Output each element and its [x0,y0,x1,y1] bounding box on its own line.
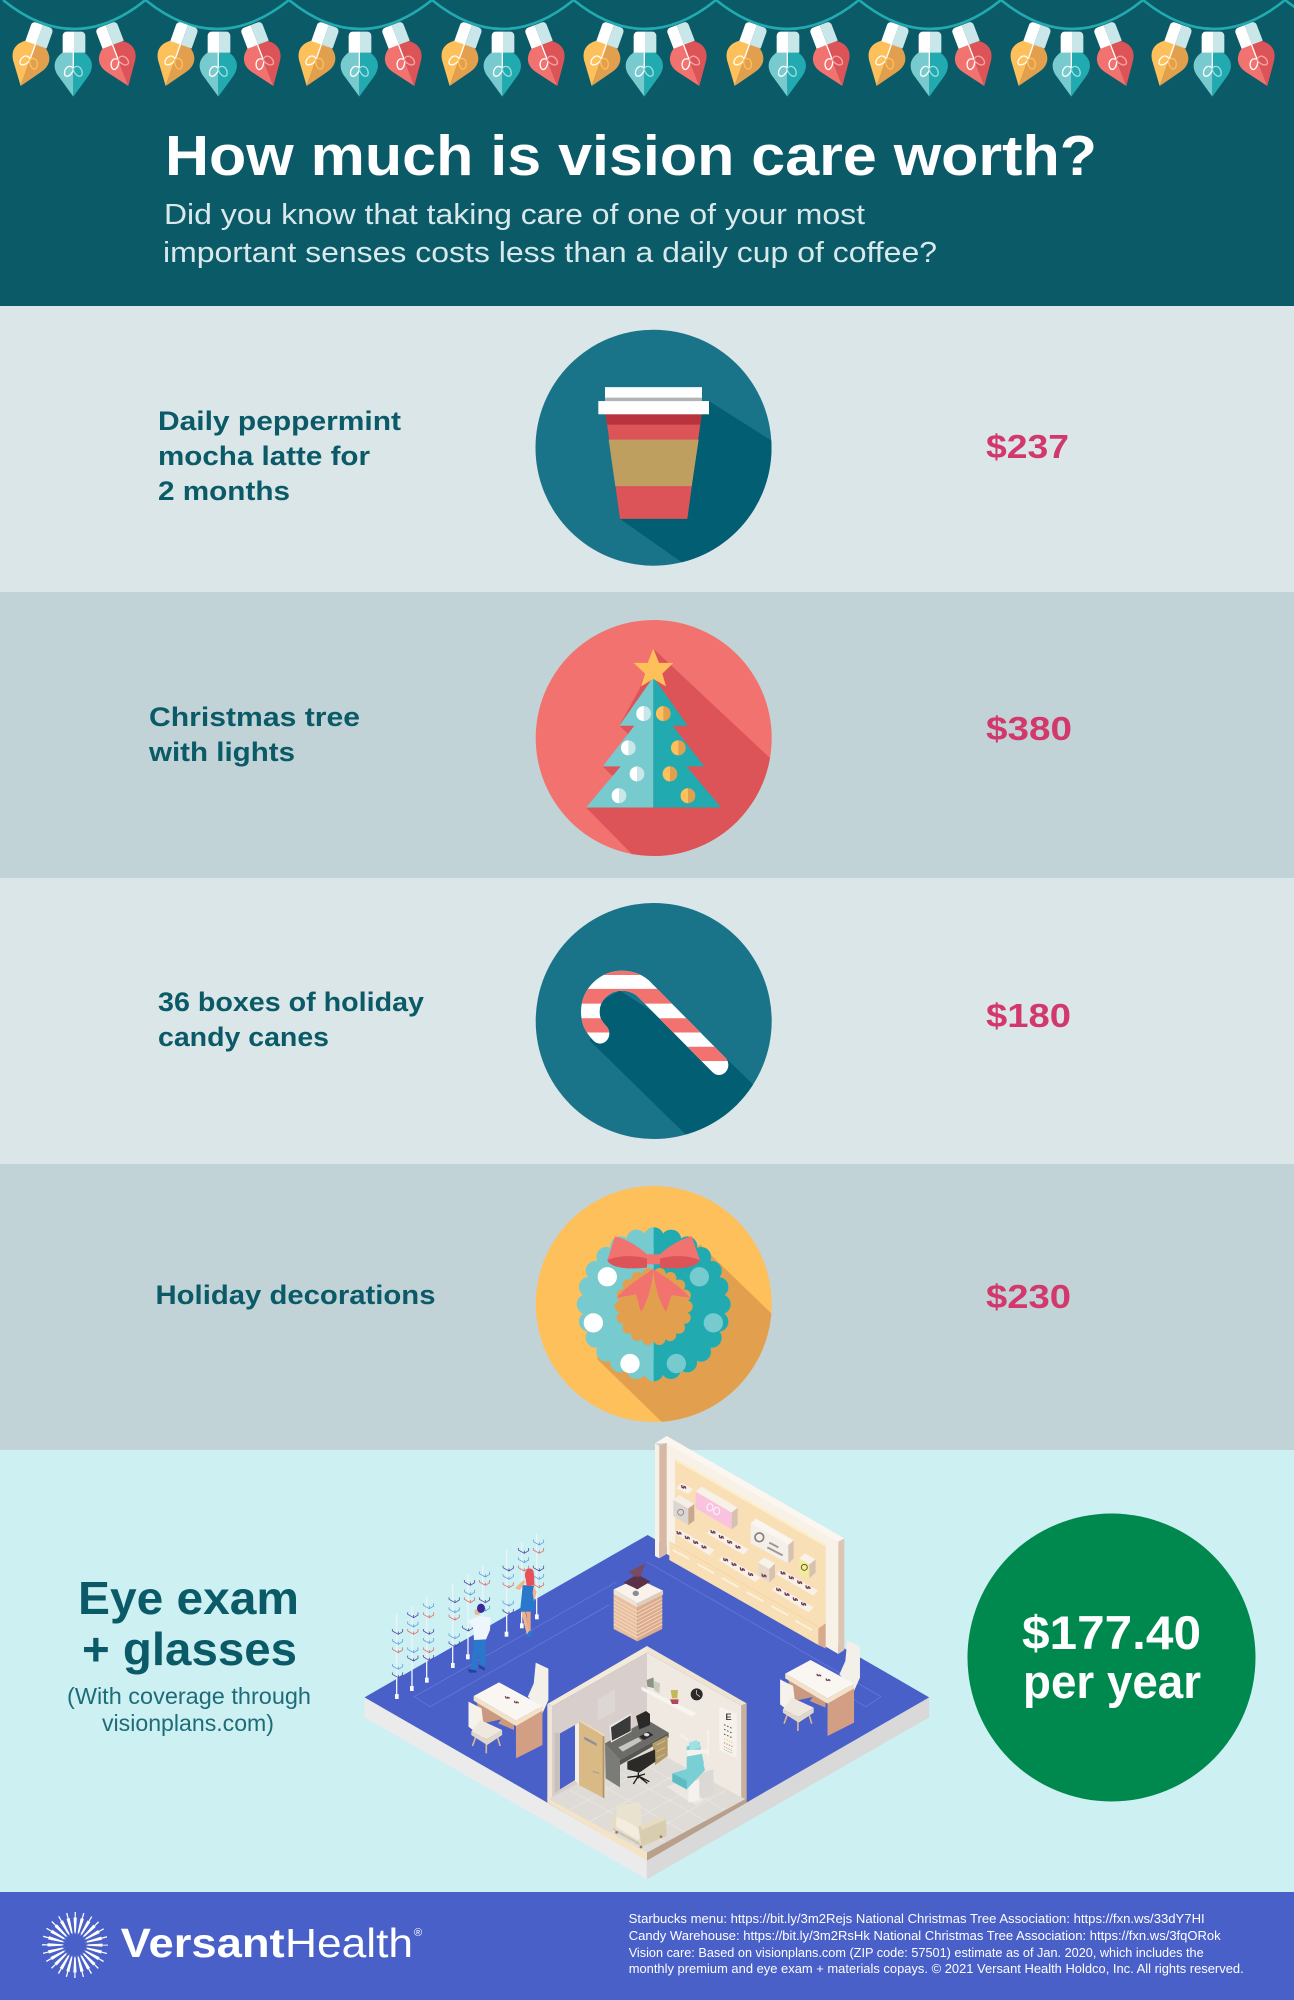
sources: Vision care: Based on visionplans.com (ZIP code: 57501) estimate as of Jan. 2020, which includes the [629,1945,1204,1960]
panel: footer [0,1892,1294,2000]
sources: Starbucks menu: https://bit.ly/3m2Rejs National Christmas Tree Association: https://fxn.ws/33dY7HI [629,1911,1205,1926]
subtitle: Did you know that taking care of one of your most [164,199,865,231]
label: candy canes: candy canes [158,1022,329,1052]
label: christmas tree [148,702,360,767]
icon: wreath [536,1186,777,1430]
heading: eye exam + glasses: + glasses [82,1623,297,1675]
note: coverage [67,1683,311,1736]
wall clock [691,1688,703,1700]
heading: eye exam + glasses [78,1572,299,1675]
price: candy canes: $180 [986,997,1071,1034]
open box [758,1557,775,1583]
sources [629,1911,1244,1976]
eye chart: E [725,1712,732,1722]
pink sign [696,1487,738,1529]
label: latte [158,406,401,506]
price: decorations: $230 [986,1278,1071,1315]
pedestal display [614,1563,663,1641]
string lights [3,0,1294,97]
callout: price circle [968,1514,1256,1802]
display wall [655,1436,844,1654]
icon: sunburst [53,1923,97,1967]
label: candy canes [158,987,424,1052]
heading: eye exam + glasses: Eye exam [78,1572,299,1624]
sources: monthly premium and eye exam + materials copays. © 2021 Versant Health Holdco, Inc. All rights reserved. [629,1961,1244,1976]
panel: peppermint latte row [0,306,1294,592]
right desk and chairs [780,1640,860,1736]
platform floor [365,1535,929,1879]
door [579,1721,604,1798]
panel: christmas tree row [0,592,1294,878]
left desk and chairs [469,1663,548,1758]
icon: christmas tree [536,620,777,870]
panel: header [0,0,1294,306]
note: coverage: (With coverage through [67,1683,311,1709]
small frame [673,1495,694,1525]
exam room [547,1646,747,1861]
armchair [611,1802,667,1848]
label: christmas tree: with lights [148,737,295,767]
doorway [560,1725,575,1789]
yellow box [799,1553,816,1578]
glasses shelves [674,1483,818,1612]
sources: Candy Warehouse: https://bit.ly/3m2RsHk National Christmas Tree Association: https://fxn.ws/3fqORok [629,1928,1221,1943]
exam chair [667,1730,715,1805]
logo: versant health: Health [285,1920,413,1966]
glasses racks [392,1533,544,1699]
label: latte: mocha latte for [158,441,371,471]
man [468,1604,491,1673]
title: How much is vision care worth? [165,124,1097,188]
icon: coffee cup [536,330,772,566]
subtitle: important senses costs less than a daily cup of coffee? [163,237,937,269]
callout: price circle: per year [1023,1655,1201,1708]
wall shelf [642,1677,697,1717]
woman [515,1569,537,1637]
logo: versant health: Versant [121,1920,285,1966]
panel: eye exam and glasses [0,1436,1294,1892]
price: tree: $380 [986,710,1072,747]
office desk [605,1711,669,1787]
office chair [627,1749,655,1784]
label: candy canes: 36 boxes of holiday [158,987,424,1017]
logo: versant health: ® [414,1927,422,1939]
label: holiday decorations: Holiday decorations [156,1280,436,1310]
label: latte: Daily peppermint [158,406,401,436]
callout: price circle: $177.40 [1022,1606,1201,1659]
price: latte: $237 [986,428,1069,465]
label: latte: 2 months [158,476,290,506]
panel: holiday decorations row [0,1164,1294,1450]
logo: versant health [53,1920,422,1967]
illustration: isometric optical store [365,1436,929,1879]
label: christmas tree: Christmas tree [149,702,360,732]
note: coverage: visionplans.com) [102,1710,274,1736]
panel: candy canes row [0,878,1294,1164]
eye chart [719,1707,737,1758]
icon: candy cane [536,903,777,1151]
subtitle [163,199,937,269]
white sign [751,1519,794,1563]
